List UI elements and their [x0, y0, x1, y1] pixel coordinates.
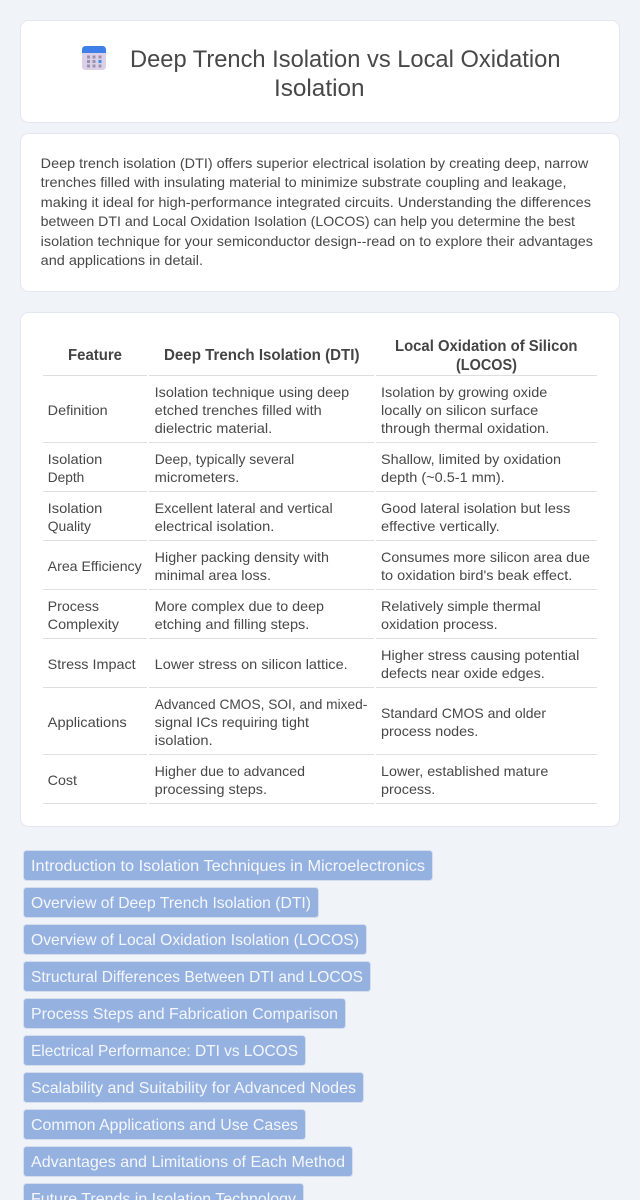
intro paragraph: trenches filled with insulating material to minimize substrate coupling and leakage,: [41, 174, 566, 190]
intro paragraph: [41, 155, 593, 268]
row: isolation depth: Shallow, limited by oxidation: [381, 451, 561, 467]
topic link 4: Structural Differences Between DTI and LOCOS: [31, 969, 363, 986]
row: isolation depth: depth (~0.5-1 mm).: [381, 469, 505, 485]
row: applications: isolation.: [155, 732, 213, 748]
topic link 2: [24, 888, 318, 918]
intro paragraph: making it ideal for high-performance integrated circuits. Understanding the differences: [41, 194, 591, 210]
topic link 9: [24, 1146, 352, 1176]
row: cost: process.: [381, 781, 435, 797]
table header: Local Oxidation of Silicon: [395, 338, 578, 355]
row: isolation quality: Excellent lateral and vertical: [155, 500, 333, 516]
table header: Feature: [68, 347, 122, 364]
row: process complexity: [48, 598, 541, 632]
topic link 6: Electrical Performance: DTI vs LOCOS: [31, 1043, 298, 1060]
intro paragraph: isolation technique for your semiconductor design--read on to explore their advantages: [41, 233, 593, 249]
topic link 8: Common Applications and Use Cases: [31, 1117, 298, 1134]
row: isolation depth: Depth: [48, 469, 84, 485]
row: isolation depth: micrometers.: [155, 469, 239, 485]
row: applications: process nodes.: [381, 723, 478, 739]
topic link 7: Scalability and Suitability for Advanced Nodes: [31, 1080, 356, 1097]
row: process complexity: Complexity: [48, 616, 119, 632]
row: cost: processing steps.: [155, 781, 267, 797]
row: cost: Lower, established mature: [381, 763, 549, 779]
row: stress impact: Lower stress on silicon lattice.: [155, 656, 348, 672]
intro paragraph: Deep trench isolation (DTI) offers superior electrical isolation by creating deep, narrow: [41, 155, 589, 171]
row: area efficiency: Higher packing density with: [155, 549, 329, 565]
title: [130, 46, 560, 102]
row: area efficiency: to oxidation bird's beak effect.: [381, 567, 572, 583]
row: isolation depth: Isolation: [48, 451, 102, 467]
row: definition: locally on silicon surface: [381, 402, 539, 418]
row: definition: through thermal oxidation.: [381, 420, 549, 436]
row: isolation quality: Quality: [48, 518, 91, 534]
topic link 3: Overview of Local Oxidation Isolation (LOCOS): [31, 932, 359, 949]
row: process complexity: More complex due to deep: [155, 598, 324, 614]
header panel: [20, 20, 620, 122]
row: stress impact: defects near oxide edges.: [381, 665, 545, 681]
row: area efficiency: [48, 549, 590, 583]
row: applications: Advanced CMOS, SOI, and mixed-: [155, 696, 368, 712]
topic link 9: Advantages and Limitations of Each Method: [31, 1154, 345, 1171]
row: isolation depth: [48, 451, 561, 485]
row: applications: Applications: [48, 714, 127, 730]
table header: [68, 338, 578, 374]
row: process complexity: etching and filling steps.: [155, 616, 309, 632]
row: area efficiency: minimal area loss.: [155, 567, 271, 583]
row: applications: Standard CMOS and older: [381, 705, 546, 721]
row: applications: [48, 696, 546, 748]
table header: Deep Trench Isolation (DTI): [164, 347, 360, 364]
icon: calendar: [82, 46, 106, 70]
topic link 4: [24, 962, 370, 992]
row: isolation quality: [48, 500, 570, 534]
row: stress impact: [48, 647, 579, 681]
topic link 5: Process Steps and Fabrication Comparison: [31, 1006, 338, 1023]
row: process complexity: Process: [48, 598, 99, 614]
row: definition: Isolation technique using deep: [155, 384, 349, 400]
topic link 10: [24, 1184, 304, 1200]
row: cost: [48, 763, 549, 797]
topic link 5: [24, 998, 346, 1028]
table header: (LOCOS): [456, 357, 517, 374]
topic link 7: [24, 1072, 364, 1102]
title: Isolation: [274, 75, 364, 102]
topic link 6: [24, 1036, 306, 1066]
row: area efficiency: Consumes more silicon area due: [381, 549, 590, 565]
title: Deep Trench Isolation vs Local Oxidation: [130, 46, 560, 73]
row: stress impact: Higher stress causing potential: [381, 647, 579, 663]
row: area efficiency: Area Efficiency: [48, 558, 142, 574]
row: definition: [48, 384, 549, 436]
row: process complexity: oxidation process.: [381, 616, 498, 632]
topic link list: [24, 850, 432, 1200]
intro panel: [20, 134, 620, 292]
row: definition: Isolation by growing oxide: [381, 384, 548, 400]
topic link 1: [24, 850, 432, 880]
topic link 8: [24, 1110, 306, 1140]
topic link 1: Introduction to Isolation Techniques in Microelectronics: [31, 858, 425, 875]
row: applications: signal ICs requiring tight: [155, 714, 309, 730]
row: cost: Higher due to advanced: [155, 763, 305, 779]
row: stress impact: Stress Impact: [48, 656, 136, 672]
row: isolation quality: Isolation: [48, 500, 102, 516]
row: process complexity: Relatively simple thermal: [381, 598, 541, 614]
row: isolation depth: Deep, typically several: [155, 451, 294, 467]
row: isolation quality: effective vertically.: [381, 518, 500, 534]
topic link 3: [24, 924, 366, 954]
row: definition: dielectric material.: [155, 420, 272, 436]
row: definition: Definition: [48, 402, 108, 418]
row: isolation quality: electrical isolation.: [155, 518, 274, 534]
row: definition: etched trenches filled with: [155, 402, 322, 418]
intro paragraph: between DTI and Local Oxidation Isolation (LOCOS) can help you determine the best: [41, 213, 575, 229]
row: cost: Cost: [48, 772, 77, 788]
comparison table panel: [20, 312, 620, 826]
topic link 2: Overview of Deep Trench Isolation (DTI): [31, 895, 311, 912]
row: isolation quality: Good lateral isolation but less: [381, 500, 570, 516]
intro paragraph: and applications in detail.: [41, 252, 203, 268]
